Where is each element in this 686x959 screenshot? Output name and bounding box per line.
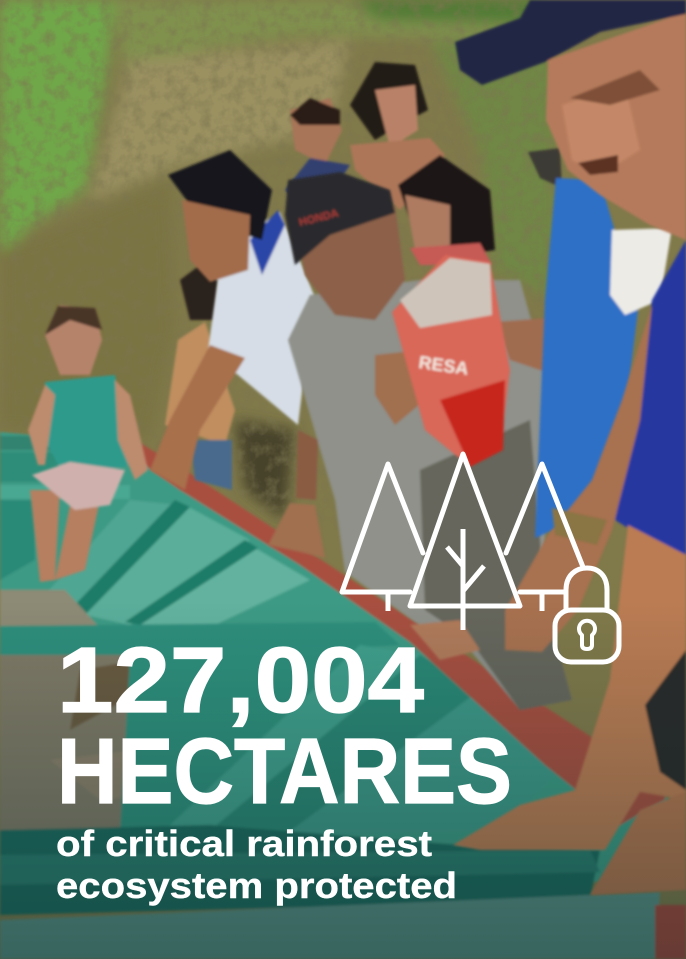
person: man in grey shirt and cap holding bottle — [268, 172, 572, 710]
caption line 1: of critical rainforest — [56, 823, 432, 864]
plastic bottle: RESA — [417, 352, 470, 379]
person: toddler in teal dress sitting on boat — [28, 305, 148, 582]
bottom shade — [0, 600, 686, 959]
person: man at back in blue shirt — [528, 148, 672, 538]
unit: HECTARES — [57, 719, 512, 823]
padlock — [555, 568, 619, 662]
people on the hillside: woman and child — [285, 62, 495, 265]
person: man in grey shirt and cap holding bottle: HONDA — [298, 207, 340, 229]
red gunwale — [140, 443, 665, 825]
headline: 127,004 hectares — [56, 628, 512, 906]
caption line 2: ecosystem protected — [56, 865, 457, 906]
plastic bottle — [392, 255, 510, 467]
person: man in white shirt — [150, 150, 314, 490]
person: man at right with navy cap — [453, 0, 686, 895]
boat hull — [0, 432, 686, 959]
right tree — [506, 464, 583, 611]
centre tree — [410, 454, 520, 630]
person: small child in plaid shirt — [165, 265, 235, 490]
left tree — [342, 464, 423, 611]
icon: trees with padlock — [342, 454, 619, 662]
figure: 127,004 — [57, 628, 424, 732]
